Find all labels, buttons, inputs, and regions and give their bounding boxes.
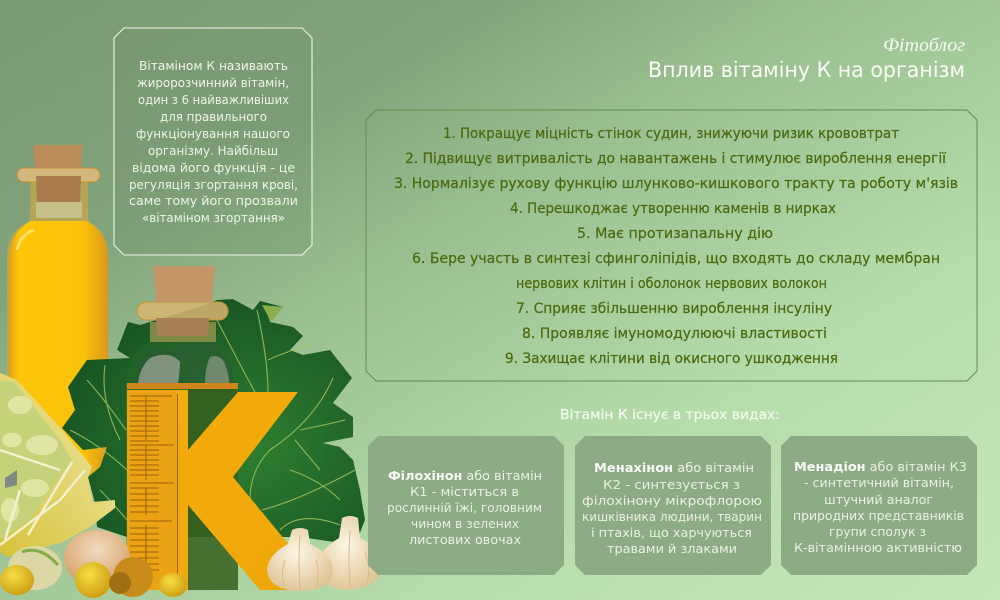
intro callout: жиророзчинний вітамін, xyxy=(137,75,289,90)
card: phylloquinone: К1 - міститься в xyxy=(410,484,519,499)
card: menaquinone: філохінону мікрофлорою xyxy=(582,493,762,508)
brand name: Фітоблог xyxy=(883,35,965,56)
intro callout xyxy=(114,28,312,255)
intro callout: регуляція згортання крові, xyxy=(129,177,298,192)
card: menaquinone: Менахінон або вітамін xyxy=(594,460,754,475)
heading: three forms: Вітамін К існує в трьох видах: xyxy=(560,407,780,423)
card: phylloquinone: Філохінон або вітамін xyxy=(388,468,542,483)
card: menadione: - синтетичний вітамін, xyxy=(804,475,954,490)
intro callout: відома його функція - це xyxy=(132,160,295,175)
intro callout: один з 6 найважливіших xyxy=(138,92,289,107)
intro callout: Вітаміном К називають xyxy=(139,58,288,73)
card: menaquinone: і птахів, що харчуються xyxy=(591,525,752,540)
card: menaquinone: кишківника людини, тварин xyxy=(582,509,762,524)
panel: effects list: 2. Підвищує витривалість до навантажень і стимулює вироблення енергії xyxy=(405,151,946,167)
panel: effects list: 3. Нормалізує рухову функцію шлунково-кишкового тракту та роботу м'язів xyxy=(394,176,958,192)
panel: effects list: 6. Бере участь в синтезі сфинголіпідів, що входять до складу мембран xyxy=(412,251,940,267)
card: menadione: природних представників xyxy=(793,508,964,523)
panel: effects list: 1. Покращує міцність стінок судин, знижуючи ризик крововтрат xyxy=(443,126,899,142)
card: menaquinone: травами й злаками xyxy=(607,541,737,556)
card: menadione: Менадіон або вітамін К3 xyxy=(794,459,967,474)
card: phylloquinone: рослинній їжі, головним xyxy=(387,500,542,515)
illustration: vitamin K foods and oil bottles xyxy=(0,145,381,598)
title: Вплив вітаміну К на організм xyxy=(648,58,965,82)
card: menadione: К-вітамінною активністю xyxy=(794,540,962,555)
intro callout: саме тому його прозвали xyxy=(129,193,298,208)
intro callout: організму. Найбільш xyxy=(148,143,278,158)
icon: small oil bottle xyxy=(126,266,238,590)
panel: effects list: 7. Сприяє збільшенню вироблення інсуліну xyxy=(516,301,832,317)
card: menadione: групи сполук з xyxy=(829,524,926,539)
icon: kale leaves xyxy=(62,299,365,545)
icon: napa cabbage xyxy=(0,373,115,557)
card: phylloquinone: листових овочах xyxy=(409,532,522,547)
card: phylloquinone: чином в зелених xyxy=(411,516,520,531)
icon: garlic bulbs xyxy=(267,516,381,591)
card: phylloquinone xyxy=(368,436,564,575)
card: menadione xyxy=(781,436,977,575)
panel: effects list: 5. Має протизапальну дію xyxy=(577,226,773,242)
icon: letter K with ruler xyxy=(127,390,298,590)
card: menadione: штучний аналог xyxy=(824,492,933,507)
intro callout: «вітаміном згортання» xyxy=(142,210,285,225)
icon: tall oil bottle xyxy=(7,145,108,474)
panel: effects list: 4. Перешкоджає утворенню каменів в нирках xyxy=(510,201,836,217)
panel: effects list: нервових клітин і оболонок нервових волокон xyxy=(516,276,827,292)
card: menaquinone xyxy=(575,436,771,575)
panel: effects list: 9. Захищає клітини від окисного ушкодження xyxy=(505,351,838,367)
card: menaquinone: К2 - синтезується з xyxy=(603,477,740,492)
panel: effects list xyxy=(366,110,977,381)
intro callout: функціонування нашого xyxy=(136,126,290,141)
intro callout: для правильного xyxy=(160,109,267,124)
icon: peas and onions xyxy=(0,530,187,598)
panel: effects list: 8. Проявляє імуномодулюючі властивості xyxy=(522,326,827,342)
